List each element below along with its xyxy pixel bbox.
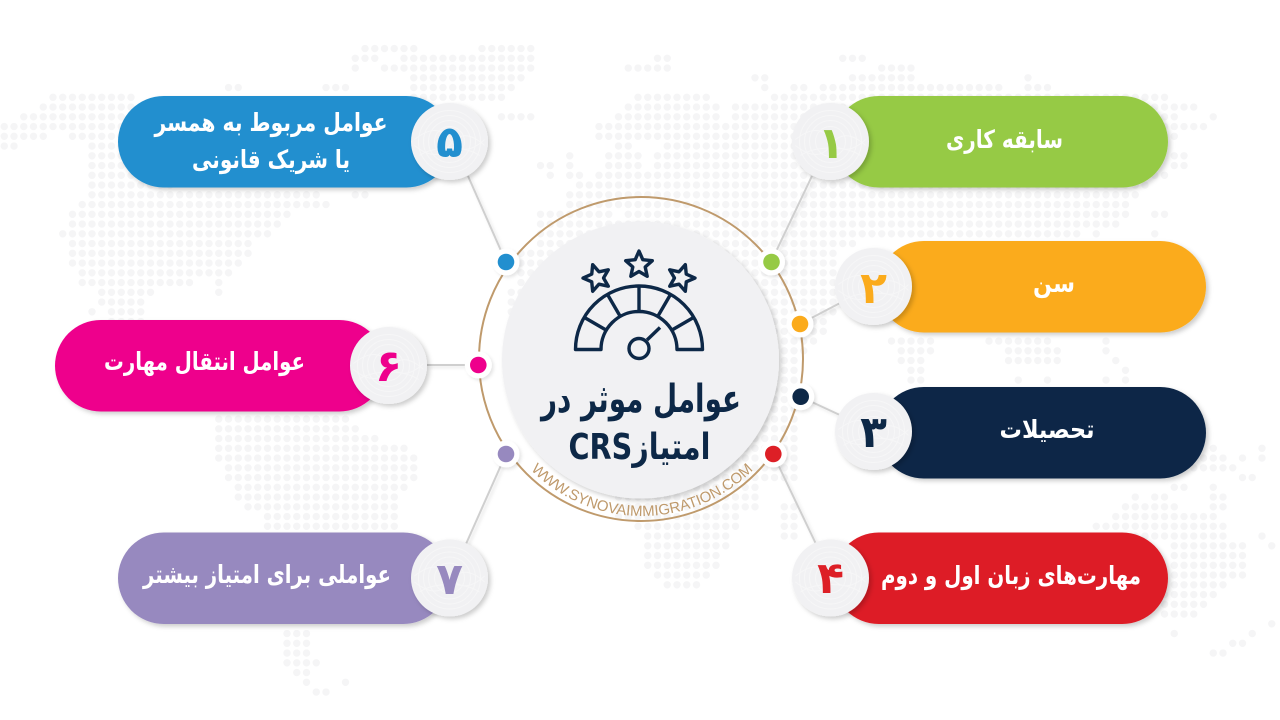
item 7: factors for more points [118, 532, 488, 624]
badge 4 [792, 540, 869, 616]
label 6: عوامل انتقال مهارت [104, 347, 305, 377]
central ring [479, 197, 803, 521]
badge 3: ۳ [860, 407, 887, 458]
connector node: green [758, 248, 785, 276]
badge 5 [411, 103, 488, 180]
label 2: سن [1033, 269, 1075, 299]
label 5: عوامل مربوط به همسر [153, 108, 388, 138]
badge 7: ۷ [436, 554, 463, 605]
item 2: age [835, 241, 1206, 332]
label 7: عواملی برای امتیاز بیشتر [141, 560, 391, 590]
label 5: یا شریک قانونی [192, 145, 350, 175]
title [540, 377, 741, 468]
badge 6 [350, 327, 427, 404]
item 1: work experience [792, 96, 1168, 188]
connector node: orange [786, 310, 814, 338]
connector node: red [760, 440, 787, 468]
connector node: navy [787, 383, 814, 410]
label 4: مهارت‌های زبان اول و دوم [881, 561, 1141, 591]
item 4: first and second language skills [792, 532, 1168, 624]
label 3: تحصیلات [1000, 415, 1094, 444]
item 6: skill transferability factors [55, 320, 427, 412]
badge 2 [835, 248, 912, 325]
label 5 [153, 108, 388, 175]
central disc panel [502, 222, 779, 498]
badge 2: ۲ [860, 263, 887, 314]
connector node: purple [492, 440, 520, 468]
label 1: سابقه کاری [946, 125, 1063, 154]
connector lines from central ring to number badges [427, 176, 842, 544]
connector node: pink [465, 352, 492, 378]
website url on curve: WWW.SYNOVAIMMIGRATION.COM [533, 462, 752, 516]
title: عوامل موثر در [540, 377, 741, 422]
item 5: spouse or partner factors [118, 96, 488, 188]
badge 4: ۴ [817, 553, 844, 604]
icon: speedometer with three stars [576, 251, 702, 358]
badge 3 [835, 393, 912, 470]
badge 7 [411, 540, 488, 616]
item 3: education [835, 387, 1206, 478]
badge 1 [792, 103, 869, 180]
connector node: blue [492, 248, 520, 276]
badge 5: ۵ [436, 117, 463, 168]
badge 6: ۶ [375, 341, 402, 392]
title: امتیازCRS [568, 427, 710, 468]
badge 1: ۱ [818, 118, 844, 169]
